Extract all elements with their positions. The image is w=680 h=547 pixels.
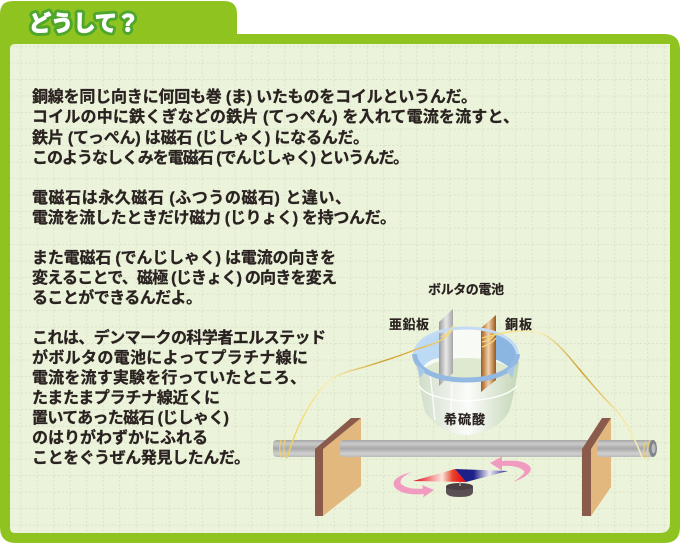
magnet base [446, 478, 473, 497]
left wooden board [315, 418, 361, 516]
bar middle section [340, 440, 582, 457]
platinum wire bar [273, 440, 653, 457]
right wooden board [582, 418, 611, 516]
diagram: Oersted experiment [273, 282, 657, 516]
zinc plate [439, 309, 453, 386]
text block: paragraph 2: 電磁石は永久磁石 (ふつうの磁石) と違い、 [32, 188, 351, 207]
text block: paragraph 2: 電流を流したときだけ磁力 (じりょく) を持つんだ。 [32, 209, 396, 227]
heading: tab title: どうして？ [29, 11, 139, 36]
text block: paragraph 4: ことをぐうぜん発見したんだ。 [32, 449, 250, 467]
text block: paragraph 1: 銅線を同じ向きに何回も巻 (ま) いたものをコイルというんだ。 [32, 87, 477, 106]
label: zinc plate: 亜鉛板 [389, 317, 429, 332]
right lead wire [482, 331, 650, 458]
text block: paragraph 4: これは、デンマークの科学者エルステッド [32, 328, 326, 347]
rotation arrow: left [394, 472, 434, 498]
text block: paragraph 3: 変えることで、磁極 (じきょく) の向きを変え [32, 268, 337, 287]
compass needle [413, 469, 508, 482]
label: voltaic cell: ボルタの電池 [428, 282, 504, 297]
text block: paragraph 4 [32, 328, 326, 467]
heading: tab title: どうして？ [29, 11, 139, 36]
voltaic cell: cup [414, 328, 519, 435]
text block: paragraph 4: のはりがわずかにふれる [32, 428, 208, 447]
label: dilute sulfuric acid: 希硫酸 [444, 412, 485, 427]
text block: paragraph 1: コイルの中に鉄くぎなどの鉄片 (てっぺん) を入れて電流を流すと、 [32, 107, 519, 126]
text block: paragraph 1: このようなしくみを電磁石 (でんじしゃく) というんだ。 [32, 149, 409, 167]
text block: paragraph 3: ることができるんだよ。 [32, 288, 202, 307]
text block: paragraph 4: 置いてあった磁石 (じしゃく) [32, 409, 229, 427]
text block: paragraph 2 [32, 188, 396, 227]
text block: paragraph 1 [32, 87, 519, 167]
cup rim [414, 328, 518, 380]
text block: paragraph 1: 鉄片 (てっぺん) は磁石 (じしゃく) になるんだ。 [32, 129, 369, 147]
bar right section with end cap [597, 440, 657, 457]
text block: paragraph 4: 電流を流す実験を行っていたところ、 [32, 369, 306, 387]
text block: paragraph 3 [32, 249, 337, 307]
text block: paragraph 3: また電磁石 (でんじしゃく) は電流の向きを [32, 249, 336, 267]
left lead wire [280, 326, 453, 458]
copper plate [481, 315, 496, 392]
rotation arrow: right [490, 456, 531, 482]
text block: paragraph 4: たまたまプラチナ線近くに [32, 388, 220, 407]
text block: paragraph 4: がボルタの電池によってプラチナ線に [32, 348, 308, 367]
label: copper plate: 銅板 [505, 317, 532, 332]
